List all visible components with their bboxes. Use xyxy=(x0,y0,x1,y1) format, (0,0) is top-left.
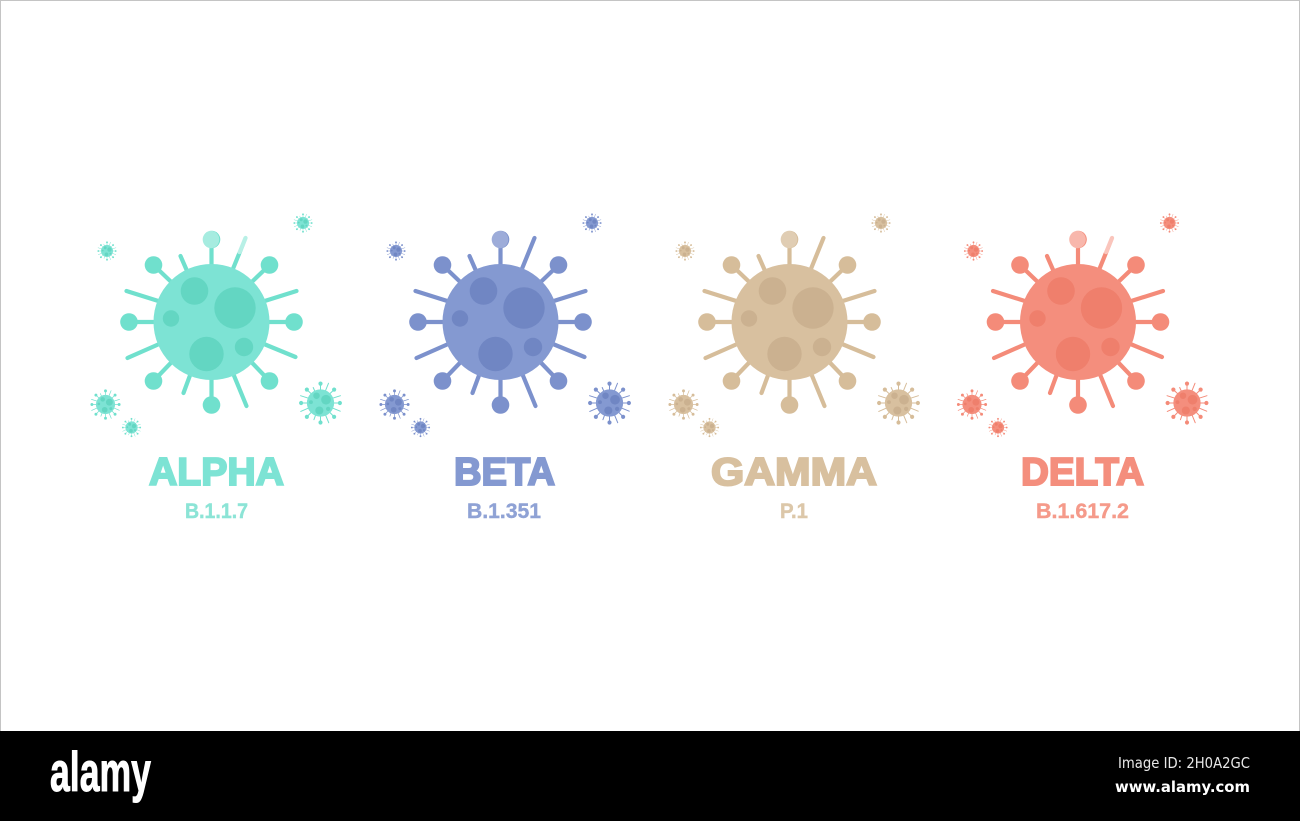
image id: Image ID: 2H0A2GC xyxy=(1118,754,1250,772)
panel: gamma variant xyxy=(668,213,920,523)
label: B.1.617.2: B.1.617.2 xyxy=(1036,500,1129,523)
icon: large delta virus xyxy=(987,231,1169,414)
label: B.1.1.7: B.1.1.7 xyxy=(185,500,248,523)
icon: small delta virus bottom xyxy=(988,418,1008,437)
icon: small alpha virus top right xyxy=(293,213,313,233)
icon: small delta virus top left xyxy=(964,241,983,261)
icon: medium alpha virus right xyxy=(299,382,342,425)
icon: small beta virus top left xyxy=(386,241,406,261)
icon: small alpha virus lower left xyxy=(90,389,121,420)
panel: alpha variant xyxy=(90,213,342,523)
logo: alamy: alamy xyxy=(50,740,151,803)
website url: www.alamy.com xyxy=(1115,778,1250,796)
icon: small alpha virus top left xyxy=(97,241,117,261)
icon: small beta virus bottom xyxy=(411,418,430,437)
footer band xyxy=(0,731,1300,821)
heading: GAMMA: GAMMA xyxy=(711,451,877,494)
icon: small gamma virus bottom xyxy=(700,418,719,437)
icon: small delta virus top right xyxy=(1160,213,1179,233)
icon: medium delta virus right xyxy=(1166,382,1208,425)
panel: delta variant xyxy=(957,213,1208,523)
heading: BETA: BETA xyxy=(454,451,555,494)
label: B.1.351: B.1.351 xyxy=(467,500,541,523)
icon: small delta virus lower left xyxy=(957,389,987,420)
icon: medium gamma virus right xyxy=(877,382,920,425)
icon: small gamma virus top left xyxy=(675,241,695,261)
icon: small gamma virus lower left xyxy=(668,389,699,420)
icon: small beta virus top right xyxy=(582,213,602,233)
icon: small gamma virus top right xyxy=(871,213,891,233)
icon: large beta virus xyxy=(409,231,592,414)
icon: large gamma virus xyxy=(698,231,881,414)
heading: DELTA: DELTA xyxy=(1021,451,1144,494)
label: P.1: P.1 xyxy=(780,500,808,523)
heading: ALPHA: ALPHA xyxy=(149,451,284,494)
icon: large alpha virus xyxy=(120,231,303,414)
icon: small beta virus lower left xyxy=(379,389,410,420)
icon: medium beta virus right xyxy=(588,382,631,425)
panel: beta variant xyxy=(379,213,631,523)
icon: small alpha virus bottom xyxy=(122,418,141,437)
